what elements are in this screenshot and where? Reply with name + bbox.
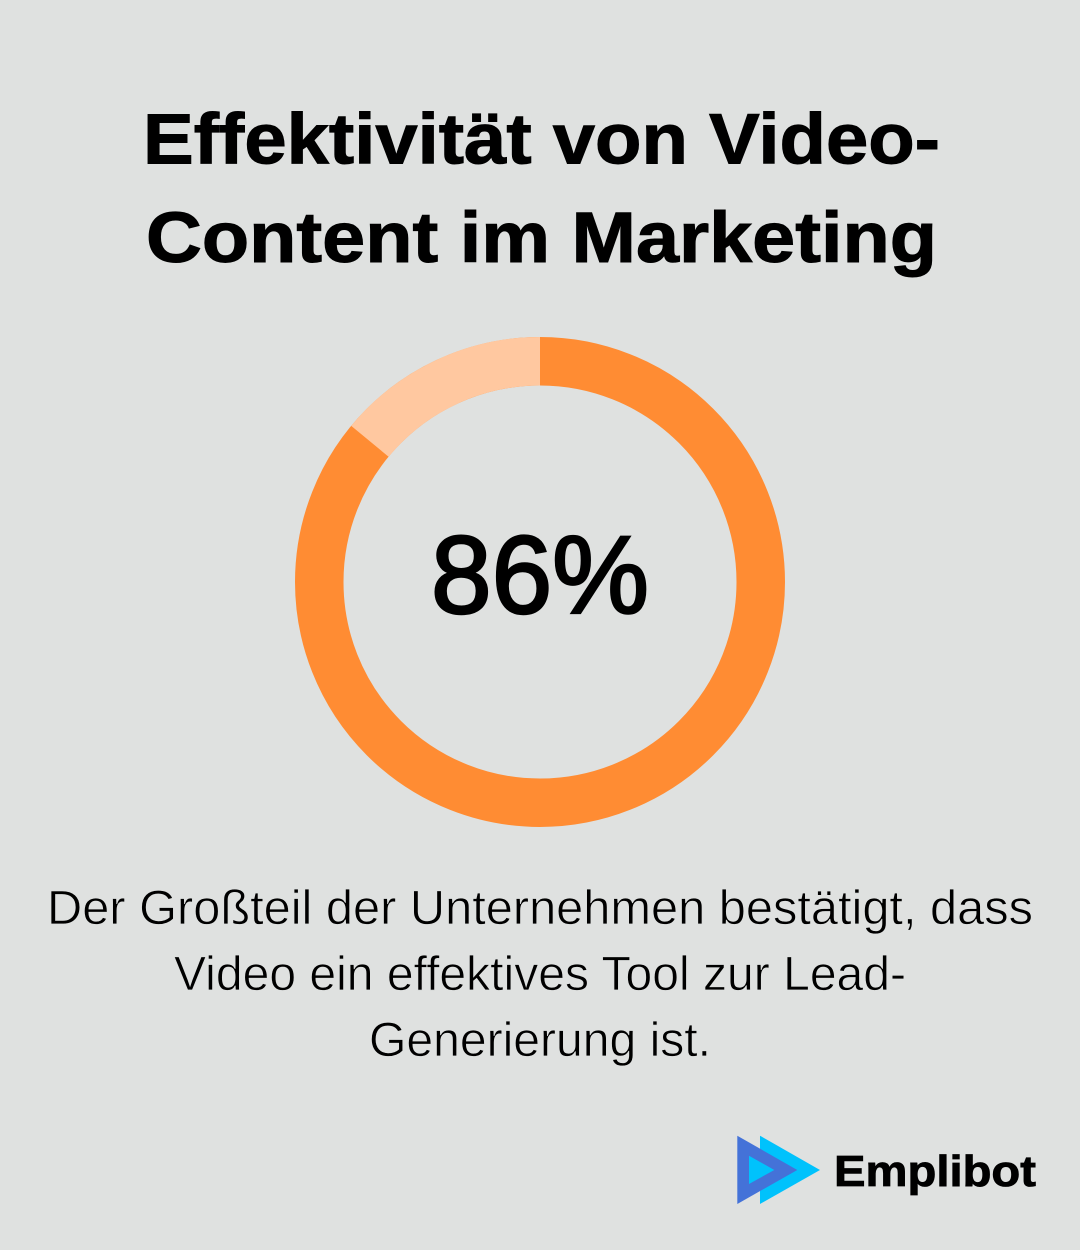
logo wordmark: Emplibot (834, 1147, 1036, 1196)
donut chart: 86% (319, 361, 761, 803)
description text: Generierung ist. (369, 1014, 711, 1067)
description text: Video ein effektives Tool zur Lead- (174, 948, 906, 1001)
description text: Der Großteil der Unternehmen bestätigt, dass (47, 882, 1033, 935)
title (143, 100, 940, 278)
logo: Emplibot (737, 1136, 1036, 1204)
description text (47, 882, 1033, 1067)
donut value: 86% (431, 514, 649, 637)
title: Content im Marketing (146, 199, 937, 278)
icon: play triangles (737, 1136, 820, 1204)
title: Effektivität von Video- (143, 100, 940, 180)
